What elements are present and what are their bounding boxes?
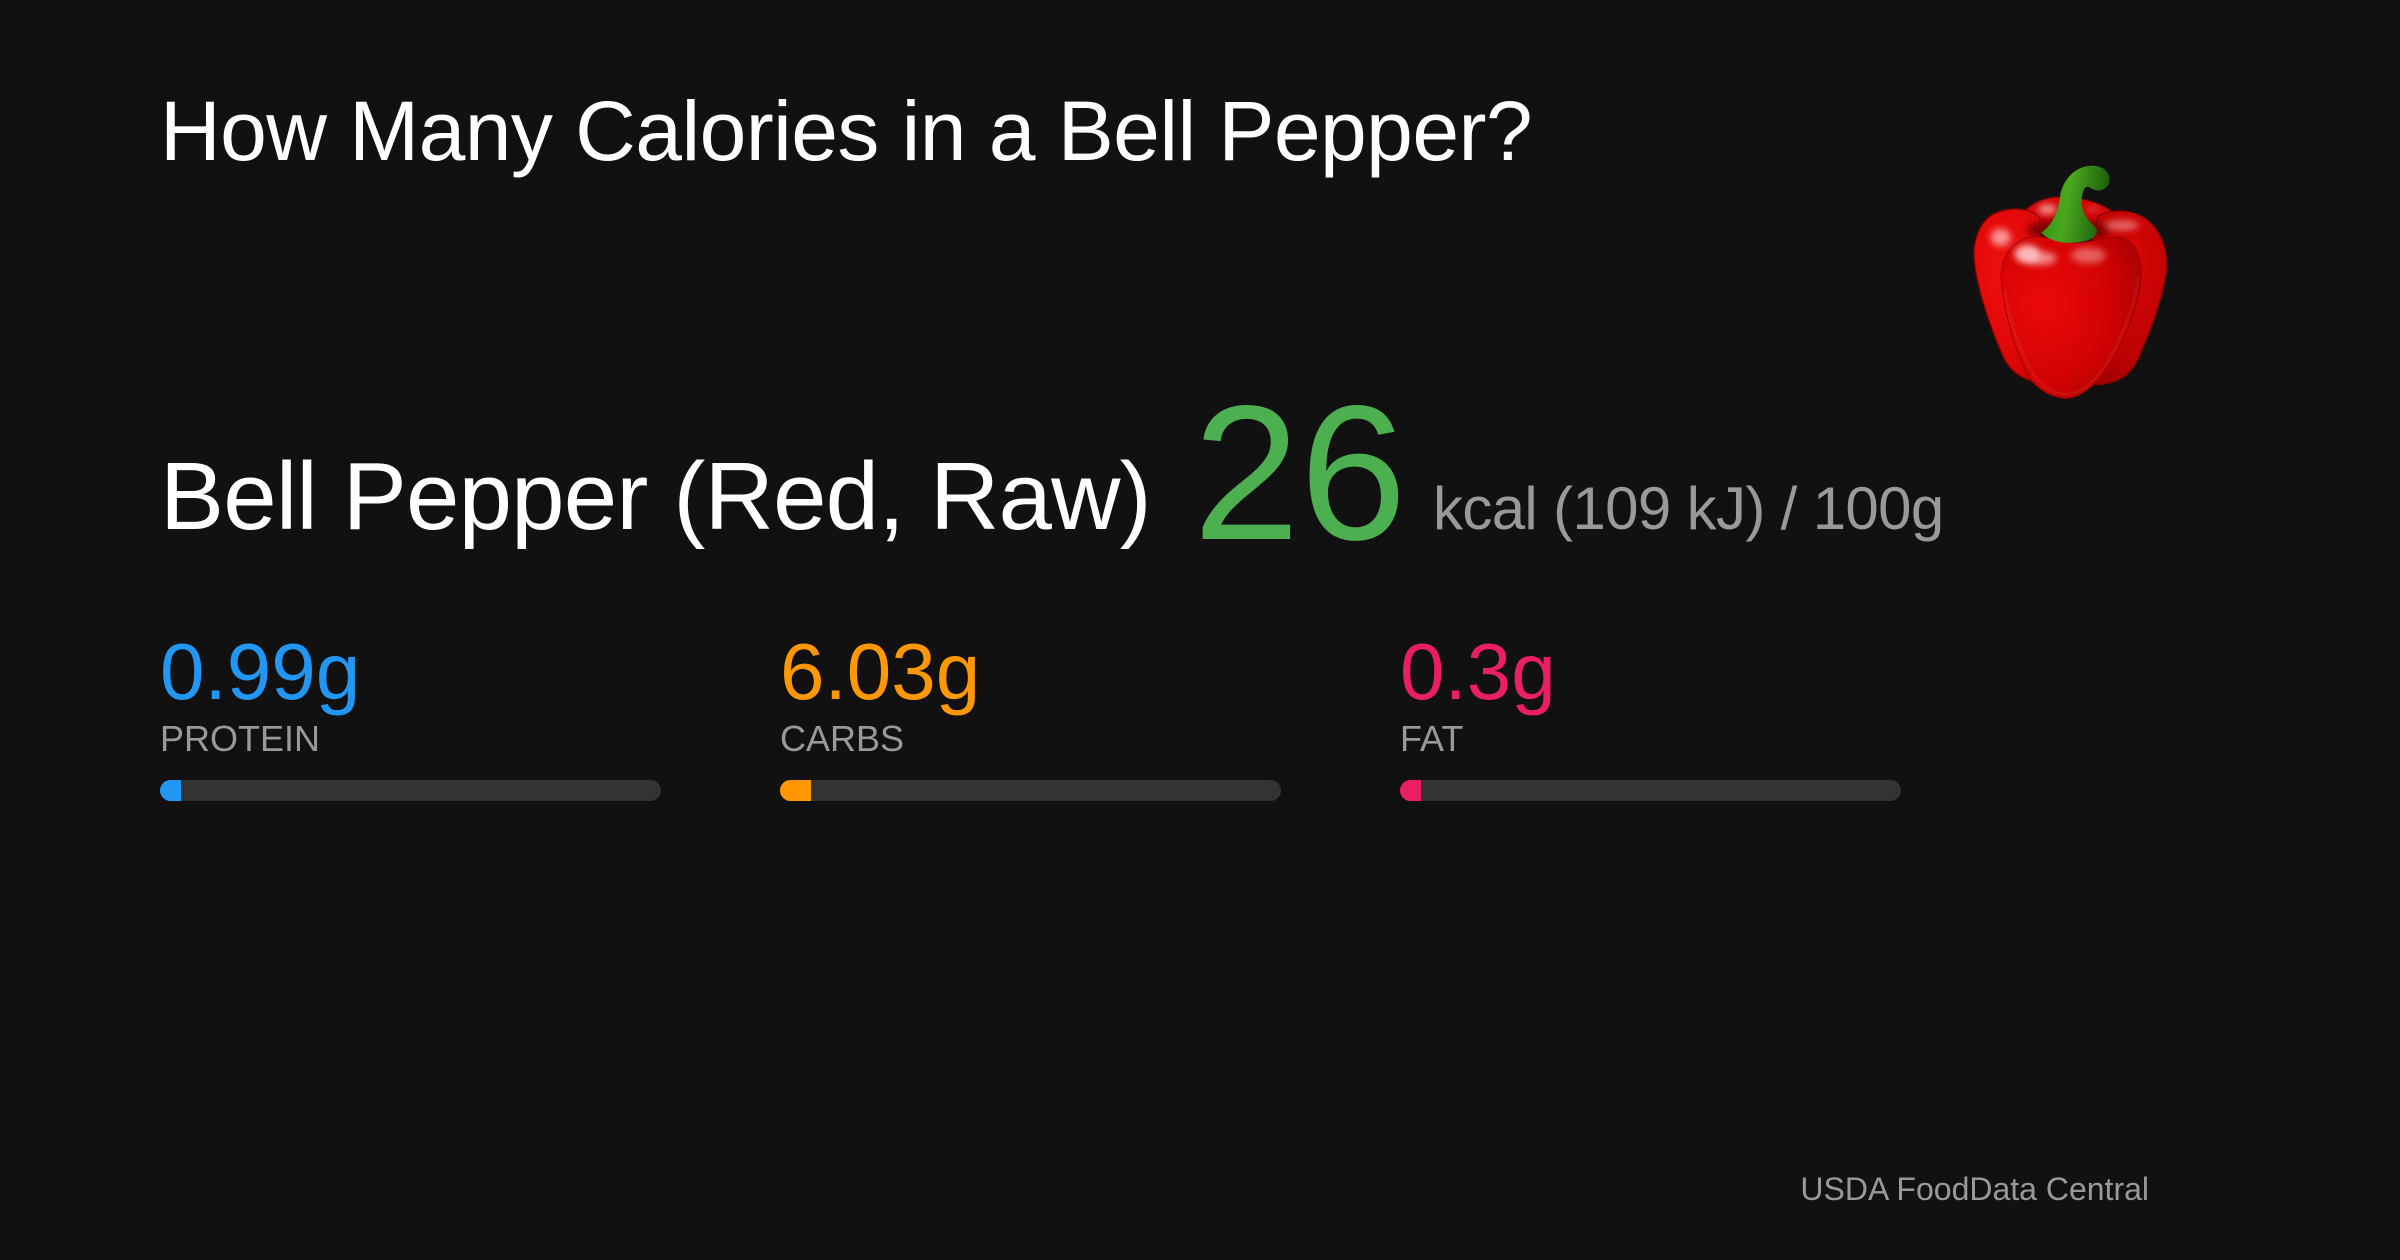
icon: red bell pepper bbox=[1973, 166, 2168, 399]
protein bar bbox=[160, 780, 661, 801]
macro: protein bbox=[160, 627, 360, 759]
calorie number: 26 bbox=[1193, 365, 1407, 580]
highlights bbox=[1991, 204, 2139, 265]
fat bar bbox=[1400, 780, 1901, 801]
left lobe bbox=[1974, 209, 2073, 382]
carbs bar bbox=[780, 780, 1281, 801]
source footer: USDA FoodData Central bbox=[1800, 1171, 2149, 1207]
front lobe bbox=[2001, 237, 2141, 398]
food name: Bell Pepper (Red, Raw) bbox=[160, 443, 1151, 550]
shadow around stem base bbox=[2027, 219, 2110, 241]
title: How Many Calories in a Bell Pepper? bbox=[160, 84, 1532, 178]
protein value: 0.99g bbox=[160, 627, 360, 716]
carbs label: CARBS bbox=[780, 718, 904, 759]
carbs value: 6.03g bbox=[780, 627, 980, 716]
protein label: PROTEIN bbox=[160, 718, 320, 759]
right lobe bbox=[2073, 211, 2167, 385]
fat value: 0.3g bbox=[1400, 627, 1556, 716]
macro: carbs bbox=[780, 627, 980, 759]
macro: fat bbox=[1400, 627, 1556, 759]
back top lobe bbox=[2025, 197, 2112, 233]
calorie unit: kcal (109 kJ) / 100g bbox=[1433, 475, 1944, 542]
fat label: FAT bbox=[1400, 718, 1463, 759]
stem bbox=[2041, 166, 2110, 243]
